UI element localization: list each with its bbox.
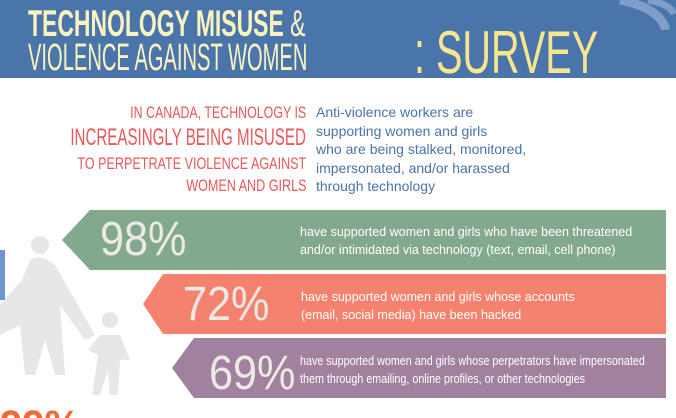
bar: 72%: (email, social media) have been hacked [301, 308, 521, 322]
title line 2: VIOLENCE AGAINST WOMEN [28, 37, 307, 79]
bar: 72%: have supported women and girls whose accounts [301, 290, 575, 304]
blue statement: who are being stalked, monitored, [316, 141, 526, 157]
bar: 98%: 98% [100, 213, 186, 266]
bar: 72%: 72% [183, 278, 269, 331]
red statement: TO PERPETRATE VIOLENCE AGAINST [77, 154, 306, 173]
bar: 69%: them through emailing, online profiles, or other technologies [300, 372, 585, 386]
silhouette: mother and child [0, 236, 130, 395]
blue statement: Anti-violence workers are [316, 104, 473, 120]
header banner [0, 0, 676, 78]
blue side tab [0, 250, 5, 300]
decorative arc icon [619, 0, 676, 30]
red statement: WOMEN AND GIRLS [186, 176, 306, 195]
bar: 69% [172, 338, 666, 400]
bar: 98%: have supported women and girls who have been threatened [300, 225, 632, 239]
bar: 69%: have supported women and girls whose perpetrators have impersonated [300, 354, 645, 368]
bar: 72% [143, 274, 666, 334]
bar: 98% [62, 210, 666, 270]
red statement: IN CANADA, TECHNOLOGY IS [130, 103, 306, 122]
title line 1: TECHNOLOGY MISUSE & [28, 3, 305, 44]
red statement [70, 103, 306, 195]
blue statement: through technology [316, 178, 435, 194]
bar: 98%: and/or intimidated via technology (text, email, cell phone) [300, 243, 615, 257]
bar: 69%: 69% [209, 347, 295, 400]
red statement: INCREASINGLY BEING MISUSED [70, 124, 306, 151]
blue statement [316, 104, 526, 194]
blue statement: impersonated, and/or harassed [316, 160, 510, 176]
title SURVEY: : SURVEY [414, 19, 598, 86]
blue statement: supporting women and girls [316, 122, 487, 138]
